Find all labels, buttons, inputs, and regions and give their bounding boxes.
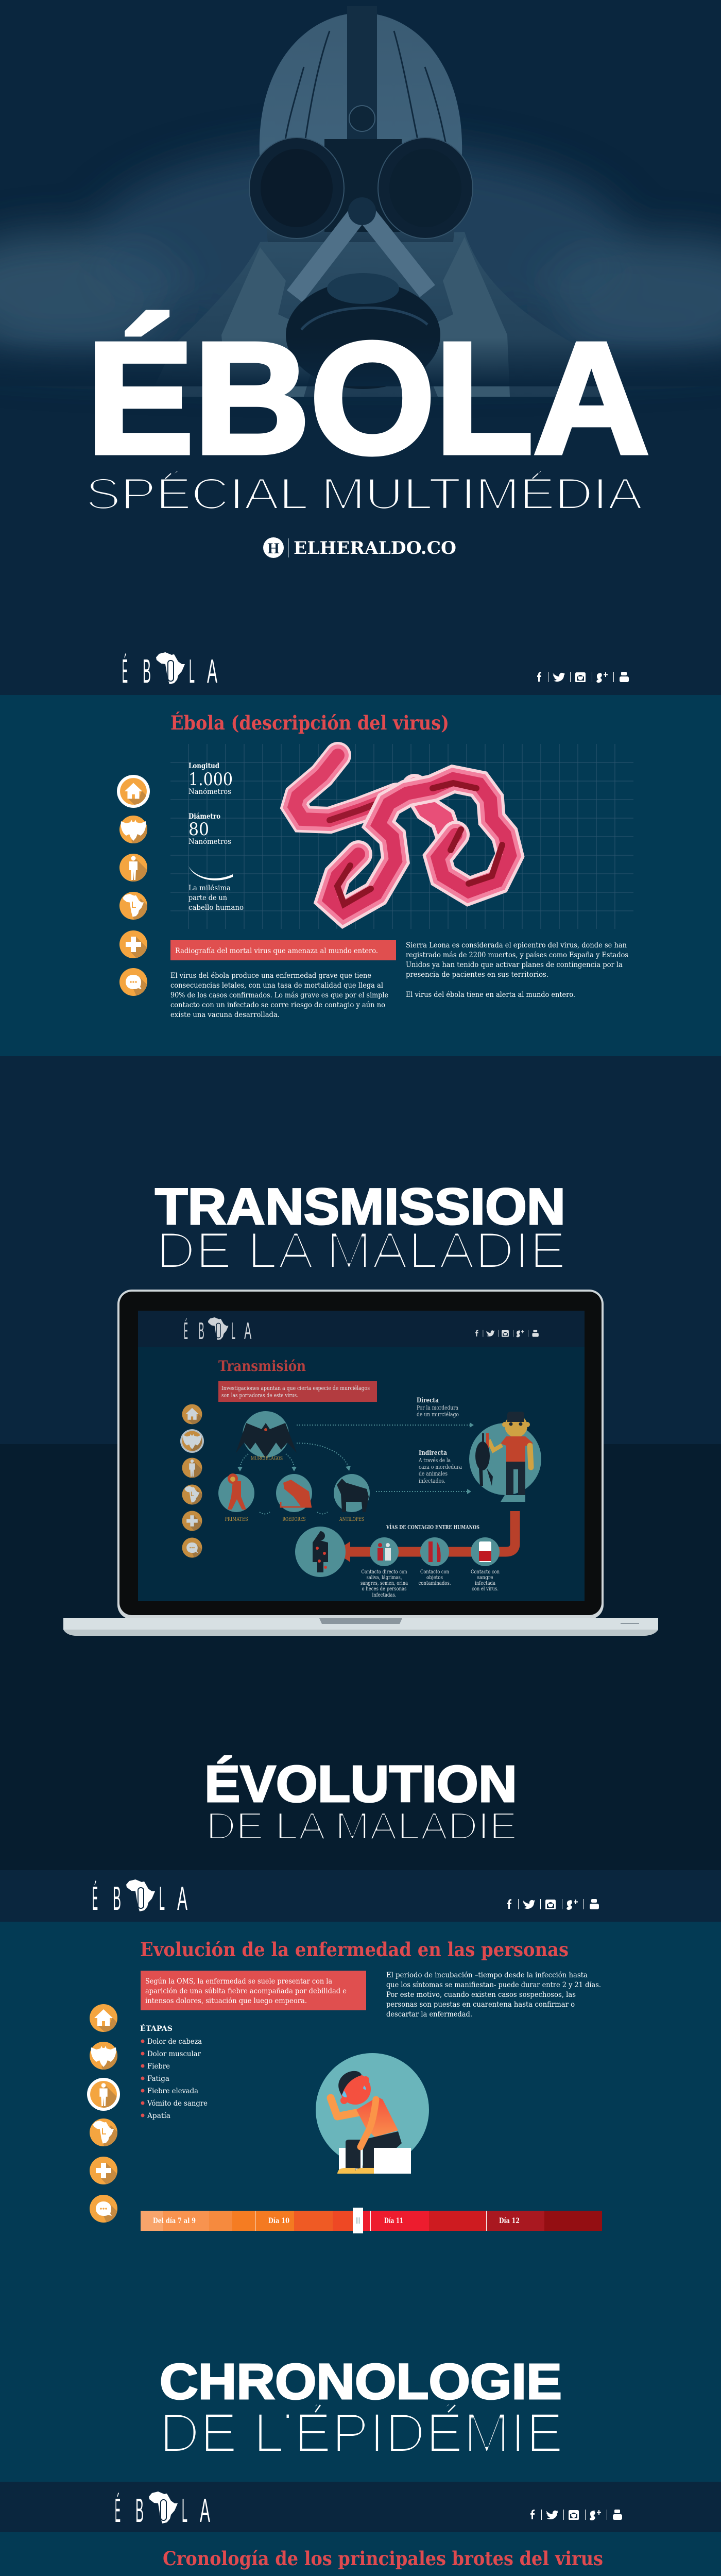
right text block: Sierra Leona es considerada el epicentro del virus, donde se han: [406, 941, 627, 950]
sick man illustration: [316, 2053, 429, 2174]
social icons: [537, 672, 629, 683]
gas mask figure: [149, 6, 603, 397]
goggles: [249, 138, 344, 239]
primate: [218, 1473, 254, 1522]
incubation text: El periodo de incubación –tiempo desde la infección hasta: [386, 1971, 588, 1979]
stages list: Fiebre: [147, 2062, 170, 2071]
incubation text: descartar la enfermedad.: [386, 2010, 472, 2019]
contagion captions: sangres, semen, orina: [360, 1581, 408, 1586]
virus measurements: [188, 762, 244, 912]
virus measurements: 80: [188, 819, 209, 840]
callout: intensos dolores, situación que luego empeora.: [145, 1997, 307, 2005]
coat: [149, 232, 603, 397]
contagion captions: Contacto directo con: [362, 1569, 407, 1575]
section: evolution: A: [177, 1879, 187, 1917]
logo: ebola: B: [135, 2492, 144, 2529]
callout: Según la OMS, la enfermedad se suele presentar con la: [145, 1977, 332, 1986]
indirect text: infectados.: [419, 1478, 445, 1484]
contagion routes: [295, 1527, 500, 1577]
timeline bar: [141, 2208, 602, 2233]
contagion captions: infectadas.: [372, 1592, 397, 1598]
heading: CHRONOLOGIE: [160, 2353, 562, 2410]
logo: ebola: É: [92, 1879, 98, 1917]
screen logo: [184, 1317, 251, 1344]
stages list: ÉTAPAS: [140, 2024, 173, 2033]
stages list: Fiebre elevada: [147, 2087, 198, 2095]
transmission arrows: [237, 1422, 474, 1514]
contagion label: VÍAS DE CONTAGIO ENTRE HUMANOS: [386, 1523, 479, 1531]
logo: ebola: É: [122, 652, 128, 690]
fade to background: [0, 337, 721, 386]
callout: [141, 1971, 366, 2010]
direct text: de un murciélago: [417, 1411, 459, 1418]
incubation text: [386, 1971, 601, 2019]
navigation icons: [117, 775, 152, 1001]
laptop screen: A: [244, 1317, 251, 1344]
logo: ebola: B: [113, 1879, 121, 1917]
contagion captions: sangre: [477, 1575, 493, 1581]
panel background: [0, 695, 721, 1056]
panel background: [0, 2532, 721, 2576]
hero section: [0, 6, 721, 558]
virus measurements: cabello humano: [188, 904, 244, 912]
right text block: [406, 941, 628, 999]
virus measurements: Diámetro: [188, 812, 220, 821]
logo: ebola: [122, 652, 217, 690]
subheading: DE L’ÉPIDÉMIE: [159, 2401, 563, 2464]
right text block: Unidos ya han tenido que activar planes de contingencia por la: [406, 961, 623, 969]
head strap and bolt: [347, 6, 377, 171]
social icons: [530, 2510, 622, 2520]
contagion captions: infectada: [475, 1581, 495, 1586]
subheading: DE LA MALADIE: [156, 1222, 566, 1279]
navigation icons: [87, 2004, 122, 2227]
direct text: Por la mordedura: [417, 1404, 458, 1411]
virus measurements: Nanómetros: [188, 788, 231, 796]
screen callout: [218, 1381, 377, 1402]
logo: ebola: [92, 1879, 187, 1917]
left text block: contacto con un infectado se corre riesgo de contagio y aún no: [170, 1001, 385, 1009]
header bar: [0, 2482, 721, 2532]
antelope: [334, 1474, 370, 1522]
screen nav: [180, 1404, 205, 1561]
heading: ÉVOLUTION: [204, 1755, 517, 1813]
virus measurements: parte de un: [188, 894, 227, 902]
laptop: [63, 1290, 658, 1636]
incubation text: que los síntomas se manifiestan- puede durar entre 2 y 21 días.: [386, 1981, 601, 1989]
logo: ebola: L: [159, 1879, 165, 1917]
contagion captions: Contacto con: [471, 1569, 500, 1575]
logo: ebola: É: [115, 2492, 121, 2529]
right text block: registrado más de 2200 muertos, y países como España y Estados: [406, 951, 628, 959]
contagion captions: saliva, lágrimas,: [367, 1575, 402, 1581]
incubation text: Por este motivo, cuando existen casos sospechosos, las: [386, 1991, 576, 1999]
panel background: [0, 1922, 721, 2482]
indirect text: caza o mordedura: [419, 1464, 462, 1470]
contagion pipe arrow: [335, 1511, 515, 1562]
left text block: 90% de los casos confirmados. Lo más grave es que por el simple: [170, 991, 388, 999]
indirect text: A través de la: [418, 1457, 451, 1464]
indirect text: [418, 1449, 462, 1484]
direct text: Directa: [417, 1397, 439, 1404]
ebola virus illustration: [295, 755, 510, 912]
hunter figure: [469, 1412, 541, 1502]
logo: ebola: L: [182, 2492, 187, 2529]
left text block: El virus del ébola produce una enfermedad grave que tiene: [170, 972, 371, 980]
main title: ÉBOLA: [87, 310, 649, 487]
callout: Radiografía del mortal virus que amenaza al mundo entero.: [175, 947, 378, 955]
bat reservoir: [236, 1411, 297, 1462]
panel title: Cronología de los principales brotes del virus: [163, 2547, 603, 2570]
dark band: [0, 1444, 721, 1870]
timeline bar: Del día 7 al 9: [153, 2217, 196, 2225]
timeline bar: Día 12: [499, 2217, 520, 2225]
stages list: Vómito de sangre: [147, 2099, 208, 2108]
screen title: Transmisión: [218, 1358, 306, 1375]
stages list: Dolor muscular: [147, 2050, 201, 2058]
contagion captions: contaminados.: [418, 1581, 451, 1586]
rodent: ROEDORES: [282, 1517, 306, 1522]
contagion captions: o heces de personas: [362, 1586, 407, 1592]
contagion captions: con el virus.: [472, 1586, 499, 1592]
nose straps: [295, 209, 427, 296]
left text block: consecuencias letales, con una tasa de mortalidad que llega al: [170, 981, 383, 990]
timeline bar: Día 11: [384, 2217, 403, 2225]
screen logo: É: [184, 1317, 188, 1344]
indirect text: de animales: [419, 1470, 448, 1477]
screen logo: L: [231, 1317, 235, 1344]
slider handle: [353, 2208, 363, 2233]
social icons: [507, 1899, 599, 1910]
logo: el heraldo: ELHERALDO.CO: [294, 538, 456, 558]
direct text: [417, 1397, 459, 1418]
laptop lid: [117, 1290, 604, 1619]
virus measurements: Nanómetros: [188, 838, 231, 846]
screen callout: Investigaciones apuntan a que cierta especie de murciélagos: [221, 1385, 370, 1392]
stages list: [140, 2024, 208, 2120]
virus measurements: Longitud: [188, 762, 219, 770]
primate: PRIMATES: [225, 1517, 248, 1522]
logo: ebola: B: [143, 652, 151, 690]
virus measurements: 1.000: [188, 769, 233, 790]
screen logo: B: [198, 1317, 204, 1344]
indirect text: Indirecta: [419, 1449, 447, 1457]
subheading: DE LA MALADIE: [206, 1804, 517, 1848]
screen social icons: [475, 1330, 539, 1337]
heading: TRANSMISSION: [155, 1178, 565, 1235]
header bar: [0, 1870, 721, 1922]
section: transmission: [0, 1178, 721, 1870]
right text block: presencia de pacientes en sus territorios.: [406, 971, 548, 979]
timeline bar: Día 10: [268, 2217, 289, 2225]
laptop base: [63, 1618, 658, 1636]
callout: aparición de una súbita fiebre acompañada por debilidad e: [145, 1987, 347, 1995]
section: evolution: [0, 1755, 721, 2482]
bat reservoir: MURCIÉLAGOS: [251, 1455, 283, 1462]
left text block: [170, 972, 388, 1019]
panel title: Evolución de la enfermedad en las personas: [140, 1938, 569, 1961]
heading: Ébola (descripción del virus): [170, 711, 449, 734]
stages list: Fatiga: [147, 2075, 169, 2083]
panel: description of the virus: A: [207, 652, 217, 690]
section: chronology: A: [200, 2492, 210, 2529]
stages list: Dolor de cabeza: [147, 2038, 202, 2046]
hero fog: [0, 144, 721, 371]
helmet: [260, 13, 462, 242]
laptop screen: [138, 1311, 585, 1601]
contagion captions: Contacto con: [420, 1569, 449, 1575]
panel: description of the virus: [0, 652, 721, 1056]
contagion captions: objetos: [426, 1575, 443, 1581]
incubation text: personas son puestas en cuarentena hasta confirmar o: [386, 2001, 575, 2009]
rodent: [276, 1474, 312, 1522]
virus measurements: La milésima: [188, 884, 231, 892]
contagion captions: [360, 1569, 500, 1598]
antelope: ANTILOPES: [339, 1517, 364, 1522]
subtitle: SPÉCIAL MULTIMÉDIA: [85, 469, 643, 519]
section: chronology: [0, 2353, 721, 2576]
left text block: existe una vacuna desarrollada.: [170, 1011, 280, 1019]
logo: el heraldo: H: [267, 540, 280, 557]
right text block: El virus del ébola tiene en alerta al mundo entero.: [406, 991, 575, 999]
screen callout: son las portadoras de este virus.: [221, 1392, 298, 1399]
measurement grid: [170, 744, 633, 929]
logo: ebola: [115, 2492, 210, 2529]
logo: ebola: L: [189, 652, 195, 690]
stages list: Apatía: [147, 2112, 170, 2120]
callout: [170, 940, 396, 960]
breathing hose: [286, 281, 440, 389]
